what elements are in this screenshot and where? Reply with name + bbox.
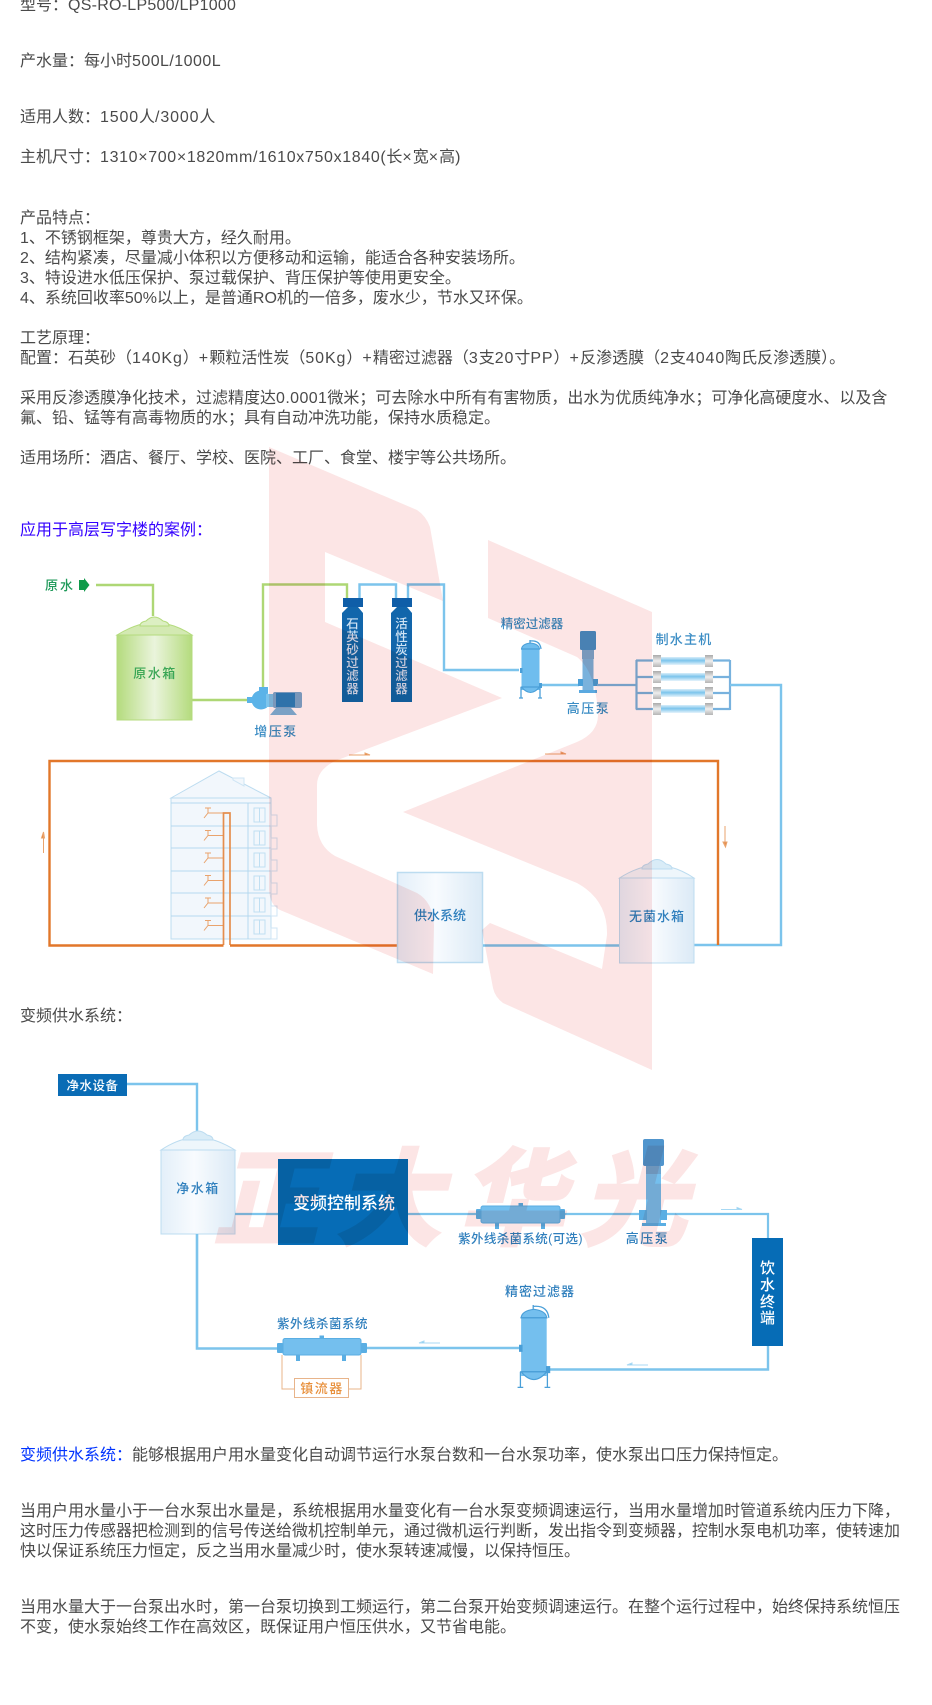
label: activated carbon filter: 过: [395, 655, 408, 670]
text block: applicable places: 适用场所：酒店、餐厅、学校、医院、工厂、食堂、楼宇等公共场所。: [20, 450, 516, 467]
label: raw water: 原水: [45, 578, 75, 593]
building: [171, 771, 277, 939]
diagram: variable frequency water supply: [58, 1074, 783, 1398]
blue pipe: tank down and along to filter: [197, 1234, 519, 1348]
green pipe: tank to pump: [192, 699, 248, 701]
pipe: filter to high pressure pump: [542, 684, 579, 686]
text block: low demand operation: 快以保证系统压力恒定，反之当用水量减少时，使水泵转速减慢，以保持恒压。: [20, 1543, 580, 1560]
label: quartz sand filter: 英: [346, 629, 359, 644]
label: purification equipment: 净水设备: [66, 1078, 119, 1093]
heading: variable frequency supply: 变频供水系统：: [20, 1008, 132, 1025]
label: UV sterilizer: 紫外线杀菌系统: [277, 1316, 368, 1331]
blue pipe: supply box to sterile tank: [483, 944, 619, 947]
arrow: bottom right: [627, 1363, 648, 1365]
arrow: orange right down: [723, 826, 727, 847]
raw water tank: [117, 617, 192, 720]
high pressure pump: [578, 631, 598, 693]
text block: process principle: [20, 330, 845, 367]
UV sterilizer: [277, 1316, 368, 1361]
label: variable frequency control: 变频控制系统: [293, 1193, 395, 1213]
label: quartz sand filter: 过: [346, 655, 359, 670]
RO membrane modules: [653, 655, 713, 715]
spec: water output: 产水量：每小时500L/1000L: [20, 53, 221, 70]
label: drinking terminal: 端: [760, 1310, 775, 1327]
label: water supply system: 供水系统: [414, 908, 466, 923]
text block: product features: [20, 209, 533, 307]
orange risers in building: [224, 813, 230, 945]
text block: low demand operation: 这时压力传感器把检测到的信号传送给微机控制单元，通过微机运行判断，发出指令到变频器，控制水泵电机功率，使转速加: [20, 1523, 900, 1540]
blue pipe: terminal to filter: [549, 1346, 768, 1370]
precision filter: [519, 640, 542, 698]
text block: high demand operation: 不变，使水泵始终工作在高效区，既保证用户恒压供水，又节省电能。: [20, 1619, 516, 1636]
icon: raw water arrow: [79, 578, 90, 592]
text block: product features: 3、特设进水低压保护、泵过载保护、背压保护等使用更安全。: [20, 270, 461, 287]
booster pump: [247, 687, 302, 739]
text block: low demand operation: [20, 1502, 900, 1560]
orange supply loop: [50, 761, 718, 946]
label: activated carbon filter: 性: [395, 630, 408, 644]
spec: people served: 适用人数：1500人/3000人: [20, 109, 215, 126]
label: UV optional: 紫外线杀菌系统(可选): [458, 1231, 583, 1246]
label: quartz sand filter: 器: [346, 682, 359, 696]
high pressure pump: [626, 1139, 669, 1246]
arrow: bottom left: [419, 1341, 440, 1343]
text block: high demand operation: [20, 1598, 900, 1636]
label: activated carbon filter: 活: [395, 617, 408, 631]
watermark: brand text: 正大华光: [208, 1142, 709, 1259]
green pipe: pump to sand filter: [263, 584, 347, 690]
quartz sand filter: [342, 598, 363, 702]
label: drinking terminal: 终: [760, 1294, 775, 1311]
text block: RO technology: 采用反渗透膜净化技术，过滤精度达0.0001微米；可去除水中所有有害物质，出水为优质纯净水；可净化高硬度水、以及含: [20, 390, 887, 407]
text block: RO technology: 氟、铅、锰等有高毒物质的水；具有自动冲洗功能，保持水质稳定。: [20, 410, 500, 427]
label: activated carbon filter: 器: [395, 682, 408, 696]
text block: product features: 4、系统回收率50%以上，是普通RO机的一倍多，废水少，节水又环保。: [20, 290, 533, 307]
text block: process principle: 工艺原理：: [20, 330, 100, 347]
diagram: high-rise office water system: [42, 578, 781, 963]
label: quartz sand filter: 石: [346, 617, 359, 631]
label: sterile water tank: 无菌水箱: [629, 909, 685, 924]
faucets: [204, 808, 223, 930]
label: drinking terminal: 水: [760, 1277, 775, 1294]
text block: RO technology: [20, 389, 887, 427]
blue pipe: main supply line: [235, 1214, 768, 1238]
arrow: orange top left: [349, 753, 370, 755]
label: activated carbon filter: 滤: [395, 669, 408, 683]
spec: host dimensions: 主机尺寸：1310×700×1820mm/1610x750x1840(长×宽×高): [20, 149, 460, 166]
text block: product features: 产品特点：: [20, 210, 100, 227]
purification equipment box: [58, 1074, 127, 1096]
variable frequency control box: [278, 1159, 408, 1245]
drinking terminal box: [752, 1238, 783, 1346]
label: booster pump: 增压泵: [254, 724, 298, 739]
sterile water tank: [620, 860, 694, 963]
label: ballast: 镇流器: [300, 1381, 344, 1396]
blue pipe: purifier to water tank: [127, 1084, 197, 1131]
heading: high-rise office case: 应用于高层写字楼的案例：: [20, 522, 212, 539]
blue pipe: RO to sterile tank: [694, 685, 781, 945]
activated carbon filter: [391, 598, 412, 702]
label: pure water tank: 净水箱: [176, 1181, 220, 1196]
text block: variable frequency intro: 变频供水系统：能够根据用户用水量变化自动调节运行水泵台数和一台水泵功率，使水泵出口压力保持恒定。: [20, 1447, 788, 1464]
label: high pressure pump: 高压泵: [626, 1231, 669, 1246]
arrow: orange left up: [42, 832, 44, 853]
ballast with wires: [282, 1355, 361, 1398]
label: raw water tank: 原水箱: [133, 666, 177, 681]
text block: product features: 1、不锈钢框架，尊贵大方，经久耐用。: [20, 230, 301, 247]
watermark: logo left piece: [269, 447, 502, 974]
label: high pressure pump: 高压泵: [567, 701, 610, 716]
label: precision filter: 精密过滤器: [501, 616, 564, 631]
text block: process principle: 配置：石英砂（140Kg）+颗粒活性炭（50Kg）+精密过滤器（3支20寸PP）+反渗透膜（2支4040陶氏反渗透膜）。: [20, 350, 845, 367]
blue pipes between filters: [360, 584, 519, 670]
precision filter: [518, 1305, 550, 1387]
green pipe: inlet to tank: [96, 585, 153, 616]
text block: low demand operation: 当用户用水量小于一台水泵出水量是，系统根据用水量变化有一台水泵变频调速运行，当用水量增加时管道系统内压力下降，: [20, 1503, 900, 1520]
label: quartz sand filter: 砂: [346, 643, 359, 657]
pure water tank: [161, 1131, 235, 1234]
label: quartz sand filter: 滤: [346, 669, 359, 683]
label: RO host: 制水主机: [656, 632, 712, 647]
pipes: pump to RO manifold: [597, 660, 730, 710]
watermark: logo right piece: [403, 540, 652, 1070]
UV sterilizer optional: [458, 1203, 583, 1246]
label: precision filter: 精密过滤器: [505, 1284, 575, 1299]
arrow: top right: [721, 1208, 742, 1210]
label: activated carbon filter: 炭: [395, 643, 408, 657]
text block: high demand operation: 当用水量大于一台泵出水时，第一台泵切换到工频运行，第二台泵开始变频调速运行。在整个运行过程中，始终保持系统恒压: [20, 1599, 900, 1616]
text block: product features: 2、结构紧凑，尽量减小体积以方便移动和运输，能适合各种安装场所。: [20, 250, 525, 267]
label: drinking terminal: 饮: [760, 1260, 775, 1277]
arrow: orange top right: [545, 752, 566, 754]
water supply system box: [398, 872, 482, 962]
